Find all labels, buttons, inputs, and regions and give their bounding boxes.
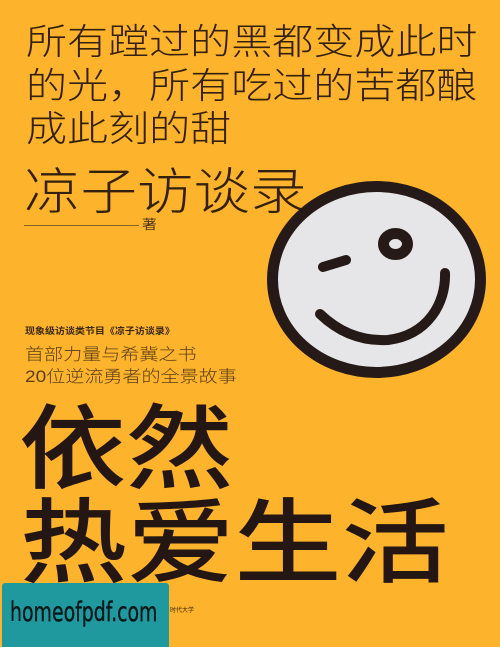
- text: programme note: 现象级访谈类节目《凉子访谈录》: [25, 326, 175, 336]
- author line: [24, 225, 139, 226]
- watermark text: homeofpdf.com: [10, 597, 157, 628]
- heading: top quote: 的光，所有吃过的苦都酿: [26, 64, 477, 106]
- heading: top quote: 成此刻的甜: [26, 108, 231, 149]
- watermark panel: [2, 583, 169, 647]
- main title: 热爱生活: 热爱生活: [20, 493, 449, 595]
- heading: 凉子访谈录: 凉子访谈录: [24, 164, 306, 220]
- icon: winking smiley face: [267, 181, 486, 378]
- heading: top quote: [26, 21, 477, 149]
- text: subtitle: 首部力量与希冀之书: [25, 346, 197, 364]
- heading: top quote: 所有蹚过的黑都变成此时: [26, 21, 477, 62]
- author label: 著: [142, 217, 157, 232]
- text: subtitle: [25, 346, 237, 386]
- text: subtitle: 20位逆流勇者的全景故事: [25, 368, 237, 386]
- publisher mark: 时代大学: [170, 608, 194, 614]
- main title: 依然: 依然: [19, 399, 233, 501]
